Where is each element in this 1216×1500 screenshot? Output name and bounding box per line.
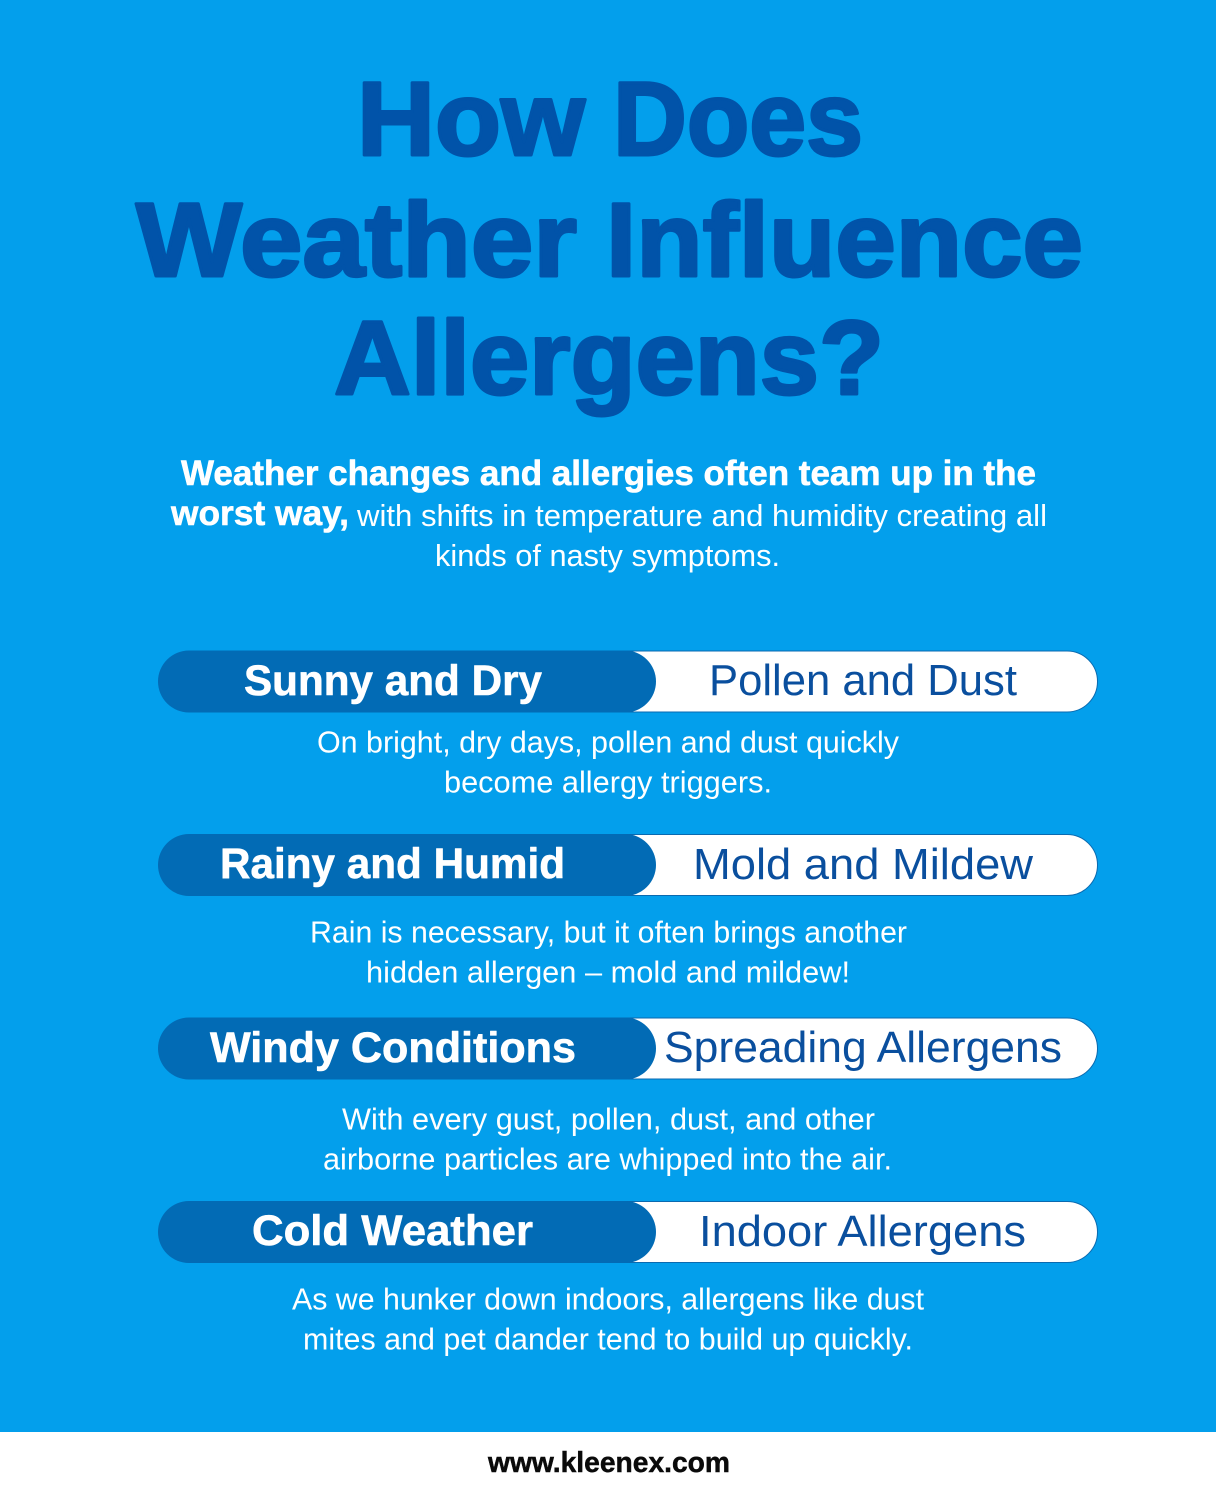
panel: sunny and dry bbox=[158, 650, 1098, 800]
allergen label: mold and mildew: Mold and Mildew bbox=[693, 840, 1033, 889]
title: Does bbox=[613, 61, 863, 178]
description: sunny and dry: On bright, dry days, pollen and dust quickly bbox=[317, 724, 899, 760]
footer url: www.kleenex.com bbox=[487, 1447, 730, 1479]
description: cold weather bbox=[292, 1282, 924, 1356]
pill: sunny and dry bbox=[158, 650, 656, 712]
description: windy conditions: With every gust, pollen, dust, and other bbox=[342, 1102, 875, 1136]
pill: indoor allergens bbox=[400, 1202, 1098, 1262]
title: Allergens? bbox=[334, 300, 884, 417]
heading: rainy and humid: Rainy and Humid bbox=[220, 840, 565, 888]
title bbox=[136, 61, 1083, 417]
heading: sunny and dry: Sunny and Dry bbox=[244, 657, 542, 705]
intro text block: worst way, bbox=[170, 494, 349, 533]
allergen label: indoor allergens: Indoor Allergens bbox=[699, 1207, 1026, 1256]
description: rainy and humid: hidden allergen – mold and mildew! bbox=[366, 954, 850, 990]
pill: cold weather bbox=[158, 1201, 656, 1263]
panel: cold weather bbox=[158, 1201, 1098, 1356]
pill: pollen and dust bbox=[400, 651, 1098, 712]
description: rainy and humid: Rain is necessary, but it often brings another bbox=[310, 914, 907, 950]
pill: mold and mildew bbox=[400, 834, 1098, 896]
pill: rainy and humid bbox=[158, 834, 656, 896]
title: Weather bbox=[136, 182, 577, 299]
intro text block: with shifts in temperature and humidity creating all bbox=[356, 498, 1047, 533]
description: cold weather: mites and pet dander tend to build up quickly. bbox=[303, 1322, 913, 1356]
allergen label: spreading allergens: Spreading Allergens bbox=[664, 1023, 1062, 1072]
description: windy conditions: airborne particles are whipped into the air. bbox=[323, 1142, 892, 1176]
intro text block: kinds of nasty symptoms. bbox=[435, 538, 780, 573]
intro text block: Weather changes and allergies often team up in the bbox=[181, 454, 1036, 493]
description: windy conditions bbox=[323, 1102, 892, 1176]
panel: rainy and humid bbox=[158, 834, 1098, 990]
description: cold weather: As we hunker down indoors, allergens like dust bbox=[292, 1282, 924, 1316]
pill: windy conditions bbox=[158, 1018, 656, 1080]
description: sunny and dry: become allergy triggers. bbox=[444, 764, 772, 800]
title: Influence bbox=[606, 182, 1083, 299]
heading: cold weather: Cold Weather bbox=[252, 1207, 533, 1255]
title: How bbox=[357, 61, 585, 178]
description: sunny and dry bbox=[317, 724, 899, 800]
allergen label: pollen and dust: Pollen and Dust bbox=[709, 656, 1017, 705]
intro text block bbox=[170, 454, 1047, 573]
heading: windy conditions: Windy Conditions bbox=[210, 1024, 576, 1072]
pill: spreading allergens bbox=[400, 1018, 1098, 1079]
description: rainy and humid bbox=[310, 914, 907, 990]
footer band bbox=[0, 1432, 1216, 1500]
panel: windy conditions bbox=[158, 1018, 1098, 1176]
